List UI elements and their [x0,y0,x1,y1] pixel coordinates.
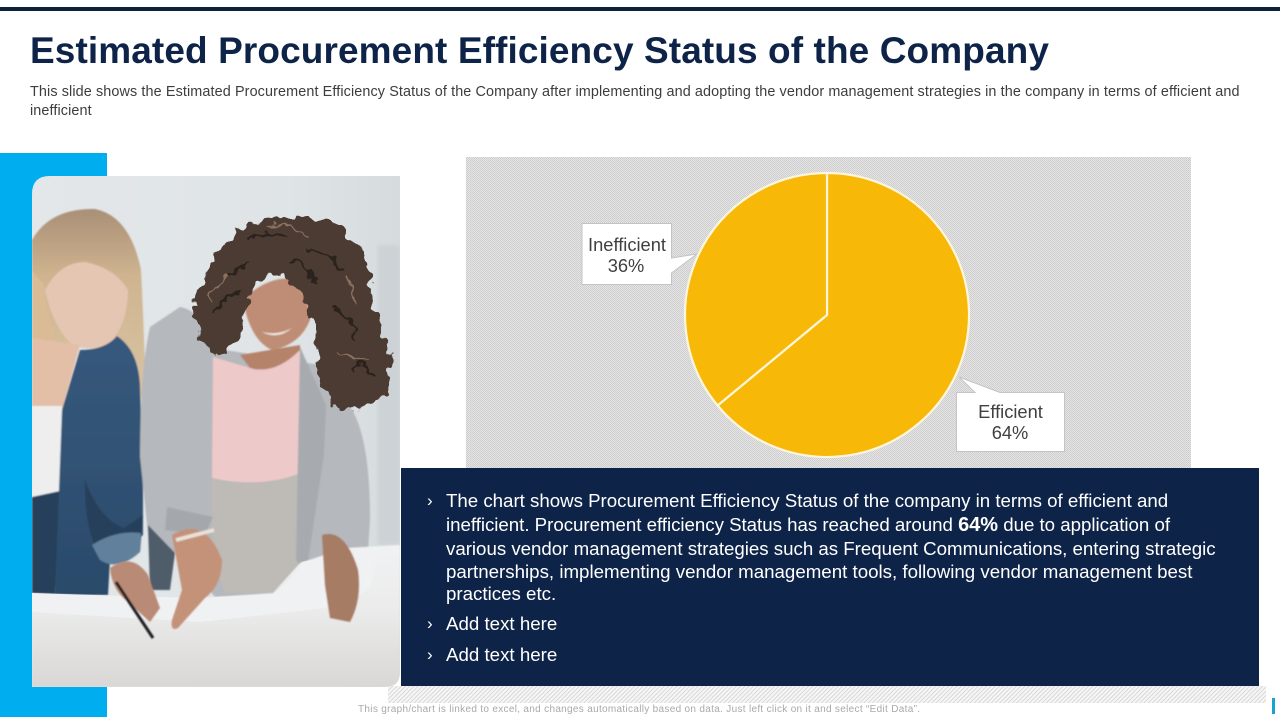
bullet list [427,490,1216,665]
description text: inefficient [30,102,92,118]
curly hair [194,216,390,411]
pie chart [685,173,969,457]
blue accent block [0,153,107,717]
callout: efficient: Efficient [978,401,1043,422]
bullet list: › [427,614,433,633]
bullet list: various vendor management strategies such as Frequent Communications, entering strategic [446,538,1216,559]
bullet list: The chart shows Procurement Efficiency Status of the company in terms of efficient and [446,490,1168,511]
callout: efficient: 64% [992,422,1028,443]
callout: inefficient [582,224,697,284]
callout: inefficient: 36% [608,255,644,276]
photo: two women reviewing a plan [32,176,400,687]
curly-haired woman [140,307,370,597]
description text: This slide shows the Estimated Procurement Efficiency Status of the Company after implementing and adopting the vendor management strategies in the company in terms of efficient and [30,84,1240,100]
bullet list: practices etc. [446,583,556,604]
bullet list: partnerships, implementing vendor management tools, following vendor management best [446,561,1192,582]
footnote: This graph/chart is linked to excel, and changes automatically based on data. Just left click on it and select “Edit Data”. [358,704,920,715]
callout: efficient [956,377,1064,452]
table and paper [32,545,400,687]
callout: inefficient: Inefficient [588,234,666,255]
blonde woman [32,209,146,400]
bullet list: › [427,491,433,510]
bullet list: › [427,645,433,664]
hands and pencil [110,529,359,638]
dark text panel [401,468,1259,686]
bullet list: inefficient. Procurement efficiency Status has reached around 64% due to application of [446,514,1170,536]
description text [30,84,1240,118]
hatched shadow strip [388,686,1266,703]
title: Estimated Procurement Efficiency Status of the Company [30,30,1049,71]
bullet list: Add text here [446,613,557,634]
slide marker [1272,698,1275,714]
top bar [0,7,1280,11]
pie chart panel [466,157,1191,468]
bullet list: Add text here [446,644,557,665]
